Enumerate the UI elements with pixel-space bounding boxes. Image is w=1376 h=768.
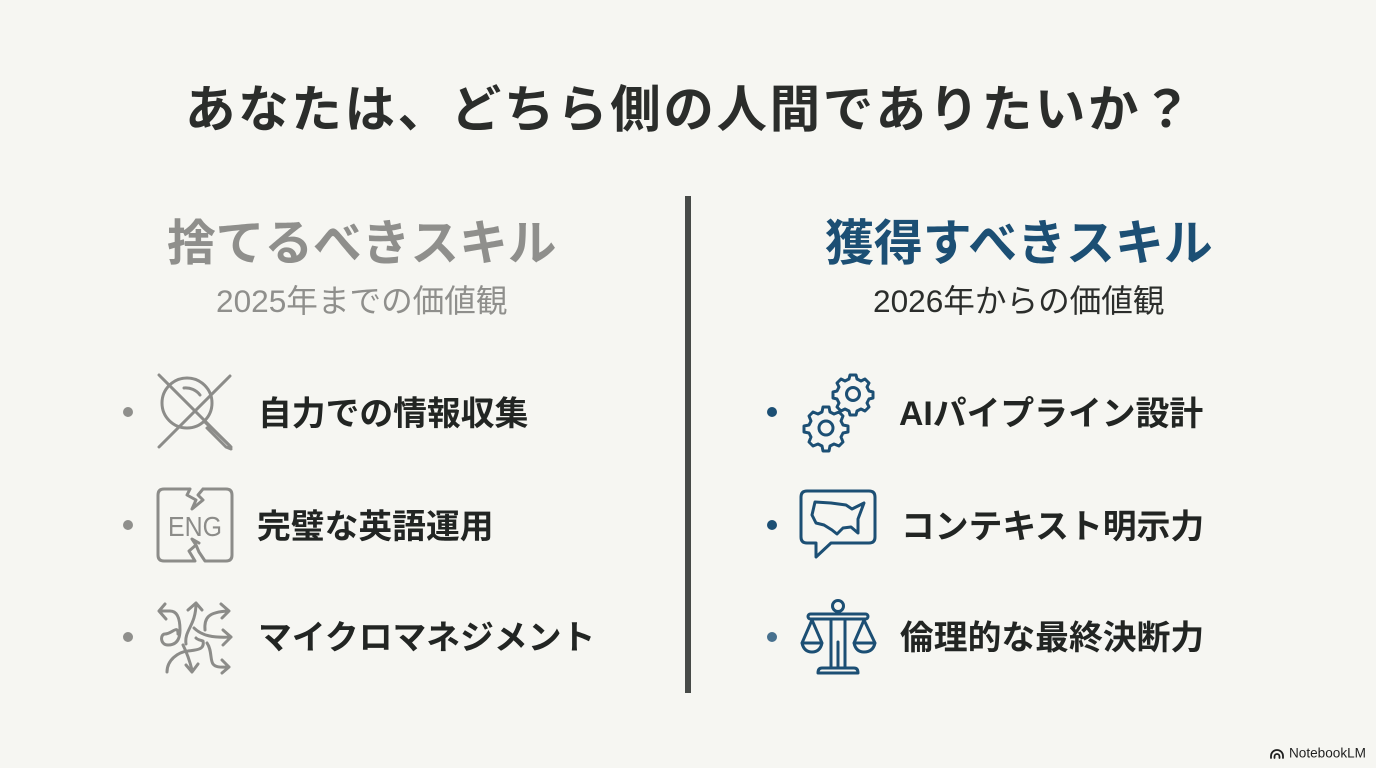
icon: scales of justice [802,600,875,673]
item: ethical final judgement [767,600,1204,673]
title: あなたは、どちら側の人間でありたいか？ [185,81,1194,138]
panel: skills to discard [123,217,595,673]
item: AI pipeline design [767,375,1203,451]
icon: tangled arrows [159,603,231,673]
bullet [123,520,133,530]
label: 完璧な英語運用 [257,508,494,546]
logo: NotebookLM [1271,746,1366,760]
icon: broken ENG card [158,489,232,561]
bullet [767,407,777,417]
icon: NotebookLM mark [1271,750,1283,758]
bullet [767,632,777,642]
item: perfect English [123,489,494,561]
panel: skills to acquire [767,217,1213,673]
wordmark: NotebookLM [1289,746,1366,760]
label: AIパイプライン設計 [899,395,1203,433]
heading: skills to acquire: 獲得すべきスキル [825,217,1213,271]
bullet [767,520,777,530]
icon: crossed-out magnifier [159,375,231,449]
label: コンテキスト明示力 [901,508,1204,546]
heading: skills to discard: 捨てるべきスキル [167,217,556,271]
label: マイクロマネジメント [258,619,595,657]
subheading: values until 2025: 2025年までの価値観 [216,283,507,319]
item: micromanagement [123,603,595,673]
label: 倫理的な最終決断力 [900,619,1204,657]
label: 自力での情報収集 [258,395,528,433]
icon: gears [804,375,873,451]
item: self-driven research [123,375,528,449]
center divider [685,196,691,693]
icon: speech bubble with US map [801,491,875,557]
icon: broken ENG card: ENG [168,511,222,542]
subheading: values from 2026: 2026年からの価値観 [873,283,1164,319]
bullet [123,632,133,642]
item: context articulation [767,491,1204,557]
bullet [123,407,133,417]
